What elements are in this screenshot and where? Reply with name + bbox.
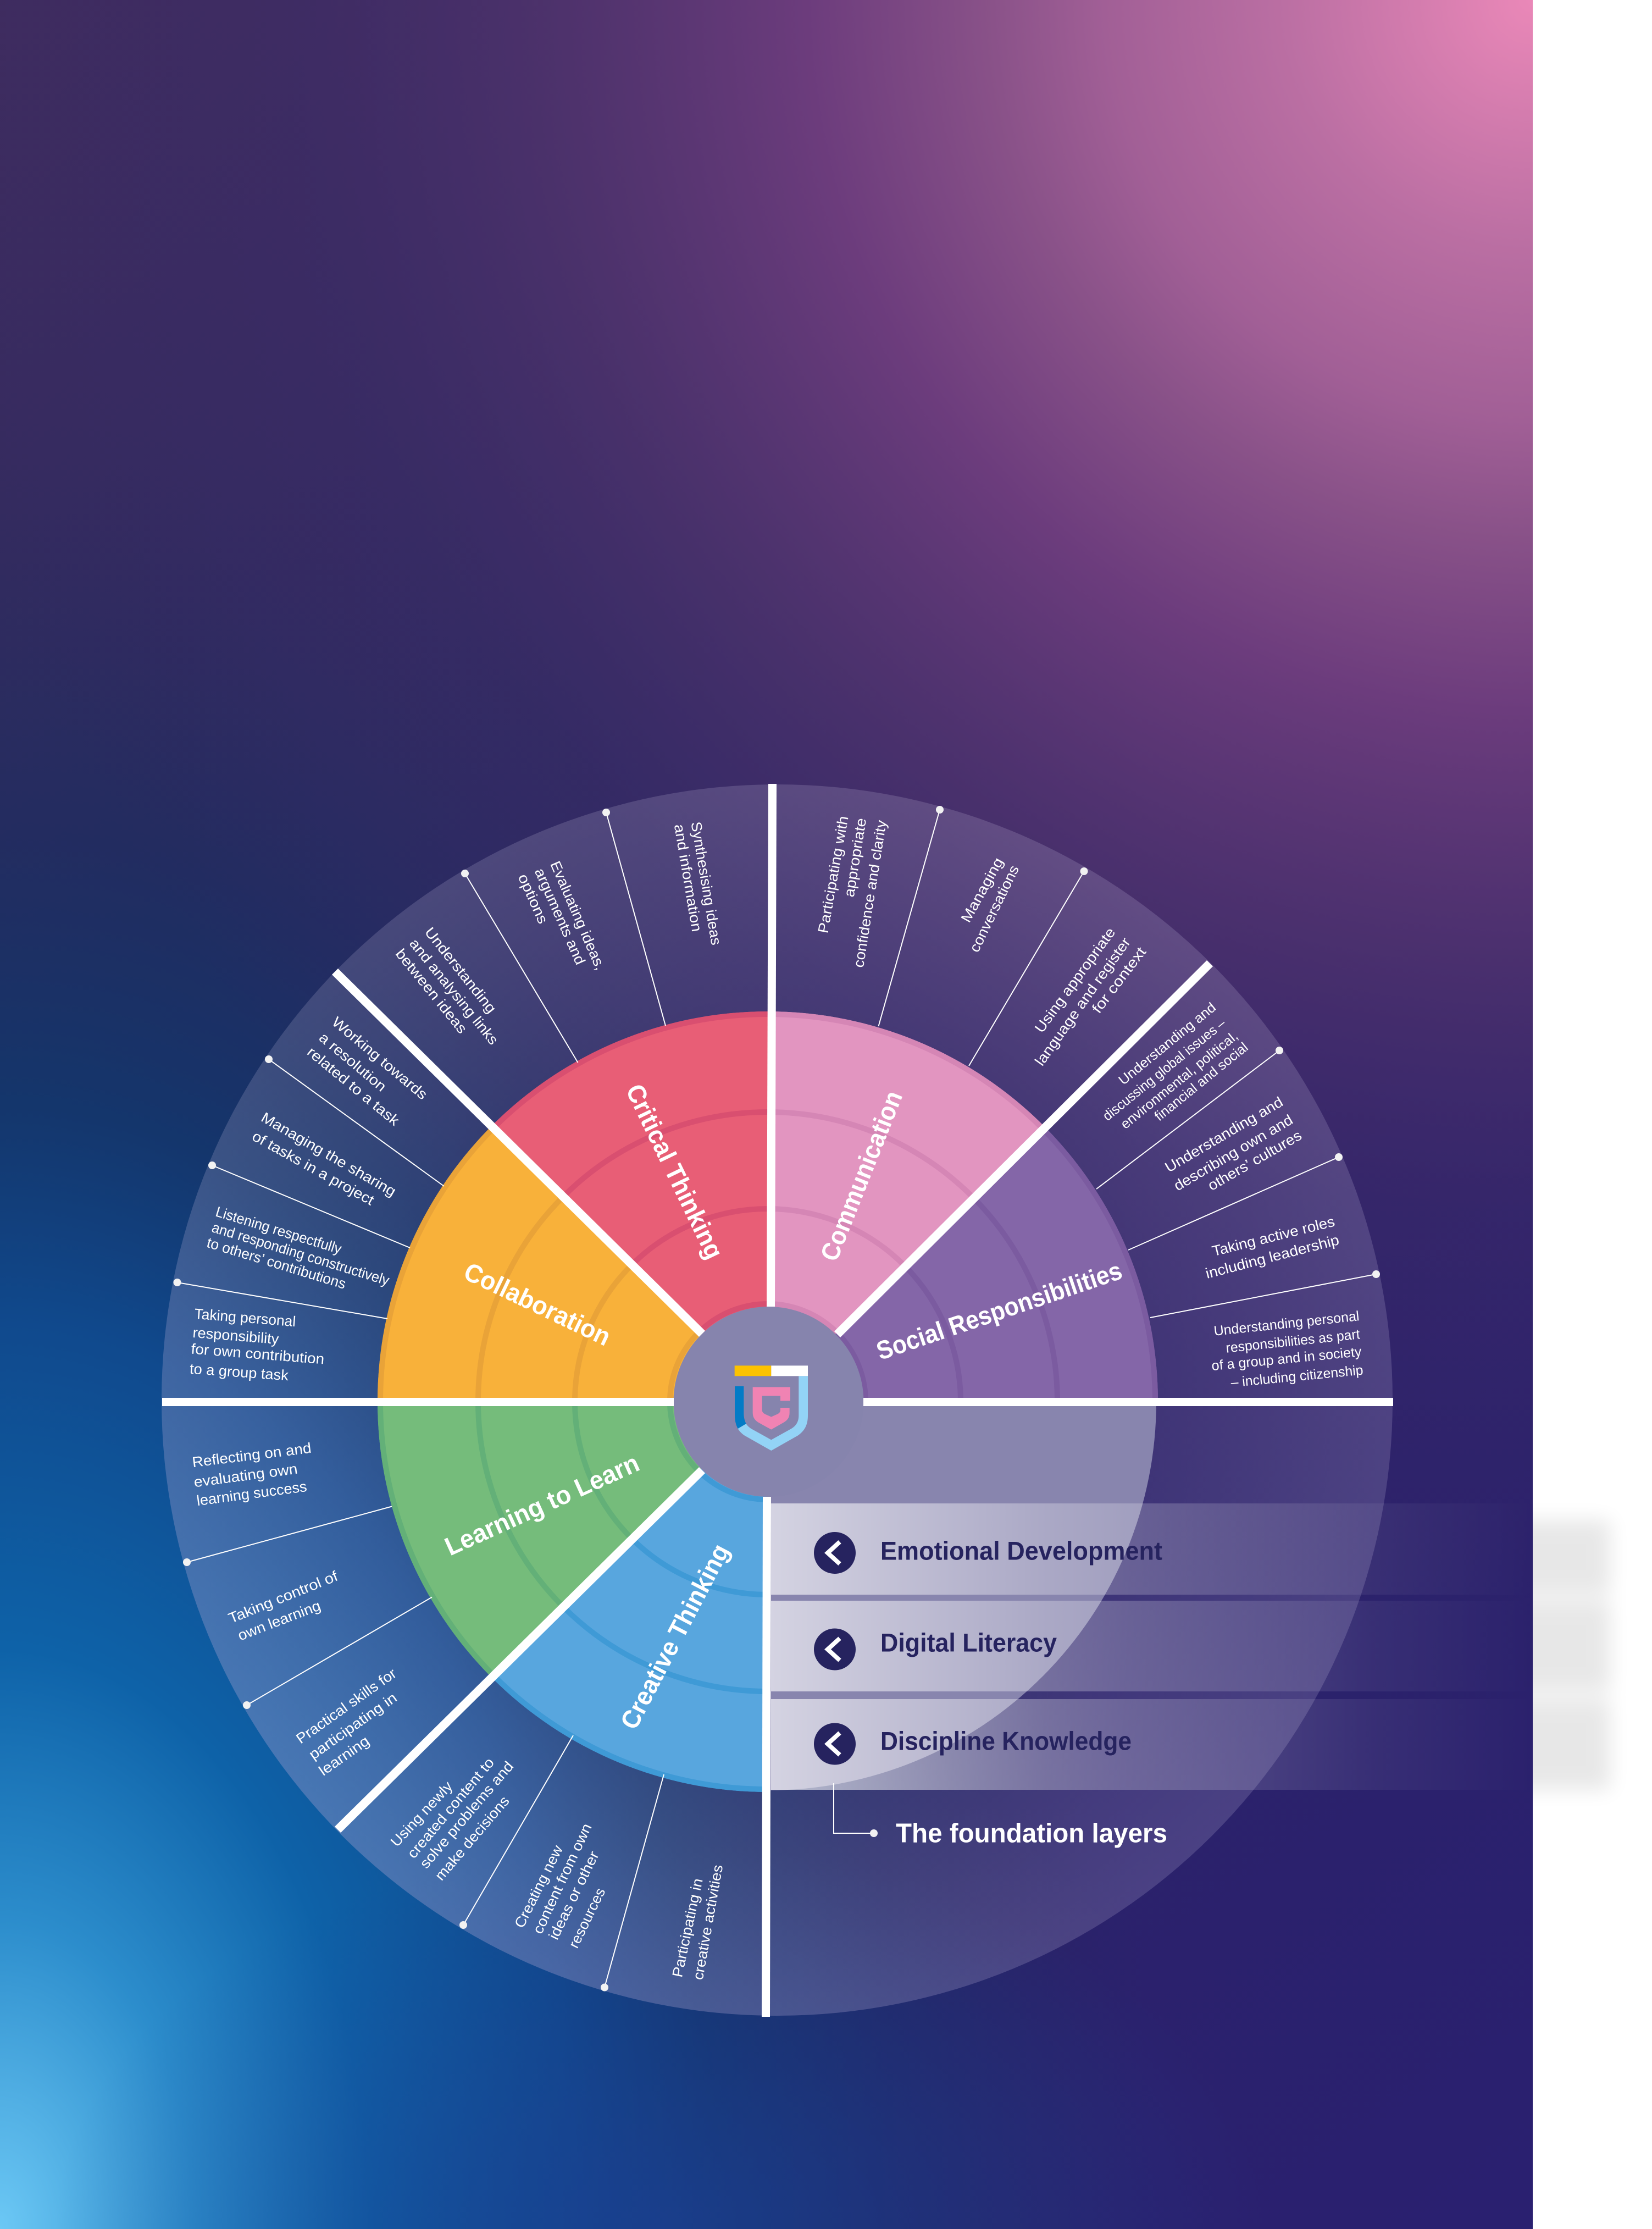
text: Participating with confidence: Participating with — [814, 815, 852, 934]
text: Participating with confidence: confidence and clarity — [850, 818, 890, 969]
text: Evaluating ideas — [515, 859, 609, 972]
layer: Discipline Knowledge — [814, 1723, 1132, 1765]
text: Using appropriate language — [1032, 925, 1150, 1069]
foundation layer bands — [771, 1503, 1533, 1790]
text: Practical skills: learning — [315, 1733, 373, 1779]
text: Reflecting on and evaluating — [191, 1440, 312, 1509]
segment: Creative Thinking — [378, 1011, 1158, 1792]
text: Taking control: own learning — [235, 1597, 323, 1644]
text: Reflecting on and evaluating: learning success — [196, 1478, 308, 1509]
text: Understanding global issues: financial and social — [1152, 1039, 1251, 1124]
foundation quadrant — [379, 1013, 1156, 1790]
text: Managing conversations: Managing — [957, 855, 1007, 925]
text: Using newly created content: solve problems and — [417, 1758, 517, 1872]
heading: Critical Thinking: Critical Thinking — [620, 1080, 729, 1263]
text: Taking personal responsibility: responsibility — [192, 1324, 280, 1347]
outer translucent ring — [162, 784, 1393, 2016]
text: Listening respectfully: Listening respectfully — [214, 1203, 344, 1257]
text: Participating in creative activities: Participating in — [669, 1877, 706, 1979]
text: Reflecting on and evaluating: evaluating own — [193, 1461, 298, 1490]
text: Creating new content — [511, 1821, 608, 1951]
text: Working towards a resolution — [304, 1014, 431, 1129]
text: Synthesising ideas: and information — [671, 823, 705, 933]
layer: Digital Literacy — [814, 1628, 1057, 1670]
text: Understanding and analysing links: and analysing links — [406, 936, 502, 1048]
text: Synthesising ideas — [671, 821, 725, 946]
text: Using appropriate language: Using appropriate — [1032, 925, 1118, 1036]
text: Evaluating ideas: options — [515, 871, 551, 926]
text: Understanding personal responsibilities: – including citizenship — [1230, 1362, 1364, 1391]
layer: Digital Literacy: Digital Literacy — [880, 1628, 1057, 1657]
segment: Communication — [769, 1011, 1042, 1334]
text: Participating in creative activities: creative activities — [690, 1863, 726, 1981]
band shadows on white margin — [1374, 1520, 1610, 1790]
segment: Critical Thinking — [495, 1011, 768, 1335]
callout: The foundation layers: The foundation layers — [896, 1818, 1167, 1848]
text: Working towards a resolution: related to a task — [304, 1043, 403, 1129]
text: Taking control: Taking control of — [226, 1568, 341, 1627]
text: Taking active roles — [1204, 1213, 1341, 1282]
layer: Emotional Development: Emotional Development — [880, 1536, 1162, 1566]
text: Taking personal responsibility: Taking personal — [194, 1306, 296, 1330]
text: Understanding personal responsibilities: Understanding personal — [1213, 1308, 1360, 1339]
heading: Collaboration: Collaboration — [459, 1257, 616, 1351]
text: Practical skills — [293, 1665, 400, 1779]
text: Managing conversations: conversations — [966, 862, 1022, 955]
text: Listening respectfully: and responding constructively — [210, 1219, 392, 1289]
text: Evaluating ideas: arguments and — [531, 866, 589, 967]
text: Using newly created content: Using newly — [387, 1778, 456, 1850]
text: Participating in creative activities — [669, 1863, 726, 1981]
text: Understanding cultures: Understanding and — [1162, 1093, 1286, 1176]
text: Taking personal responsibility: for own contribution — [191, 1341, 325, 1367]
text: Understanding cultures: describing own and — [1171, 1111, 1296, 1194]
text: Using newly created content — [387, 1755, 517, 1884]
text: Understanding personal responsibilities: responsibilities as part — [1225, 1326, 1361, 1356]
text: Understanding cultures: others’ cultures — [1205, 1127, 1305, 1194]
heading: Social Responsibilities: Social Responsibilities — [873, 1255, 1126, 1365]
text: Creating new content: ideas or other — [545, 1849, 602, 1942]
text: Creating new content: resources — [566, 1885, 608, 1951]
text: Evaluating ideas: Evaluating ideas, — [547, 859, 609, 972]
text: Working towards a resolution: Working towards — [329, 1014, 431, 1103]
heading: Learning to Learn: Learning to Learn — [440, 1448, 644, 1561]
text: Taking personal responsibility: to a group task — [189, 1360, 290, 1384]
text: Listening respectfully: to others’ contributions — [205, 1234, 348, 1292]
text: Understanding personal responsibilities: of a group and in society — [1211, 1344, 1362, 1374]
text: Synthesising ideas: Synthesising ideas — [688, 821, 725, 946]
centre circle — [674, 1307, 864, 1497]
connector lines and dots — [174, 806, 1380, 1991]
text: Participating with confidence — [814, 815, 890, 969]
text: Understanding global issues: Understanding and — [1116, 999, 1219, 1088]
text: Managing the sharing: Managing the sharing — [258, 1109, 399, 1199]
segment: Collaboration — [378, 1129, 701, 1398]
text: Practical skills: Practical skills for — [293, 1665, 400, 1747]
text: Taking active roles: including leadership — [1204, 1231, 1341, 1282]
heading: Creative Thinking: Creative Thinking — [614, 1539, 735, 1734]
heading: Communication: Communication — [814, 1087, 908, 1265]
layer: Emotional Development — [814, 1532, 1162, 1574]
white dividers — [162, 784, 1393, 2017]
text: Managing the sharing: of tasks in a project — [250, 1128, 378, 1209]
text: Understanding and analysing links: Understanding — [422, 924, 500, 1016]
text: Understanding cultures — [1162, 1093, 1305, 1194]
text: Using newly created content: created content to — [404, 1755, 497, 1861]
text: Creating new content: Creating new — [511, 1842, 566, 1931]
text: Practical skills: participating in — [306, 1689, 400, 1763]
text: Using appropriate language: language and register — [1032, 934, 1134, 1069]
text: Understanding personal responsibilities — [1211, 1308, 1364, 1391]
text: Creating new content: content from own — [529, 1821, 595, 1937]
logo: shield — [735, 1365, 808, 1451]
text: Participating with confidence: appropriate — [841, 817, 869, 898]
text: Reflecting on and evaluating: Reflecting on and — [191, 1440, 312, 1470]
text: Understanding and analysing links: between ideas — [392, 945, 470, 1037]
text: Working towards a resolution: a resolution — [316, 1029, 390, 1095]
text: Understanding global issues: discussing global issues – — [1100, 1015, 1229, 1124]
text: Taking active roles: Taking active roles — [1210, 1213, 1337, 1259]
callout: The foundation layers — [834, 1783, 1167, 1848]
segment: Social Responsibilities — [835, 1130, 1158, 1398]
segment: Learning to Learn — [378, 1406, 701, 1674]
layer: Discipline Knowledge: Discipline Knowledge — [880, 1726, 1132, 1756]
text: Using newly created content: make decisions — [431, 1793, 513, 1884]
text: Taking control — [226, 1568, 341, 1644]
text: Understanding global issues: environmental, political, — [1118, 1028, 1241, 1132]
text: Using appropriate language: for context — [1089, 943, 1150, 1016]
text: Taking personal responsibility — [189, 1306, 325, 1384]
